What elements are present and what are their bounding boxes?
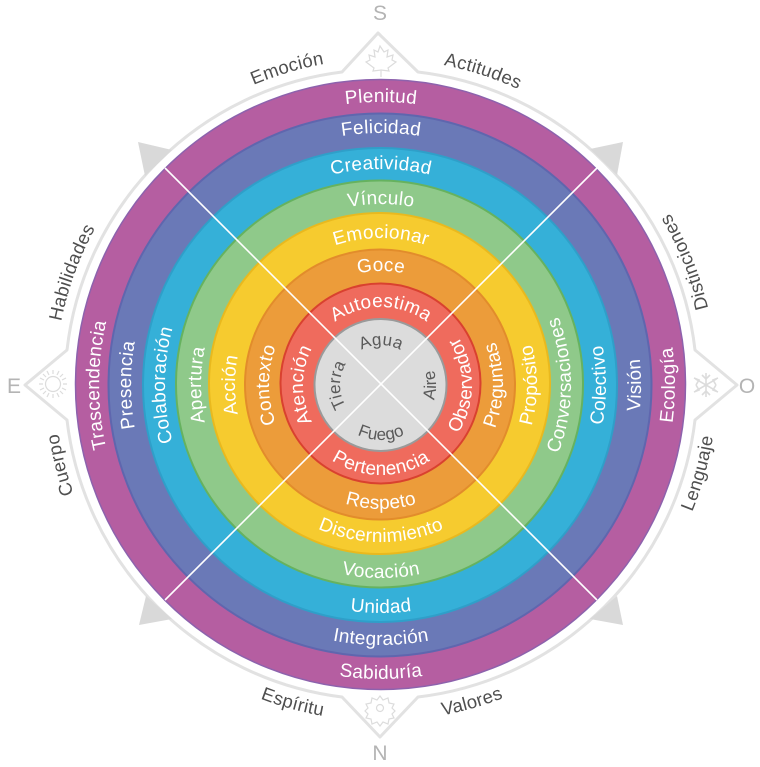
bottom ring labels: Sabiduría — [340, 663, 422, 679]
left ring labels: Apertura — [188, 348, 206, 422]
left ring labels: Trascendencia — [86, 322, 106, 451]
outer labels: Distinciones — [662, 214, 708, 310]
top ring labels: Autoestima — [332, 296, 430, 322]
top ring labels: Goce — [358, 258, 404, 273]
corner triangle NW — [138, 142, 172, 176]
bottom ring labels: Vocación — [344, 561, 419, 578]
outer labels: Habilidades — [49, 225, 94, 320]
top ring labels: Emocionar — [332, 224, 430, 245]
core labels: Tierra — [329, 362, 346, 411]
outer labels: Espíritu — [262, 687, 324, 716]
core labels — [329, 336, 436, 443]
top ring labels — [331, 88, 432, 322]
outer labels: Cuerpo — [50, 435, 72, 496]
top ring labels: Plenitud — [346, 88, 416, 104]
compass letter O: O — [739, 375, 755, 398]
core circle — [314, 319, 446, 451]
top ring labels: Creatividad — [331, 155, 432, 174]
icon: sun — [39, 370, 67, 398]
outer labels: Actitudes — [444, 54, 520, 88]
outer labels: Emoción — [250, 53, 323, 84]
compass letter E: E — [7, 375, 21, 398]
compass letter S: S — [373, 2, 387, 25]
core labels: Fuego — [358, 424, 403, 443]
icon: flower — [365, 696, 395, 726]
corner triangle SE — [590, 596, 623, 625]
right ring labels: Propósito — [519, 346, 541, 424]
icon: maple leaf — [366, 46, 396, 77]
core labels: Agua — [361, 336, 402, 350]
left ring labels: Atención — [290, 346, 312, 422]
bottom ring labels: Discernimiento — [319, 517, 442, 542]
bottom ring labels: Respeto — [346, 491, 415, 513]
icon: snowflake — [694, 373, 718, 397]
bottom ring labels — [319, 450, 442, 679]
right ring labels — [449, 318, 678, 452]
outer labels — [49, 53, 714, 716]
bottom ring labels: Unidad — [352, 597, 410, 614]
compass letter N: N — [372, 742, 388, 765]
outer labels: Valores — [440, 690, 502, 714]
bottom ring labels: Pertenencia — [332, 450, 430, 475]
left ring labels — [86, 322, 312, 451]
top ring labels: Vínculo — [346, 190, 414, 206]
left ring labels: Acción — [221, 356, 238, 414]
rings — [76, 80, 686, 690]
core labels: Aire — [424, 371, 436, 400]
bottom ring labels: Integración — [334, 628, 428, 649]
outer labels: Lenguaje — [680, 436, 714, 511]
left ring labels: Colaboración — [152, 328, 172, 443]
top ring labels: Felicidad — [342, 119, 420, 136]
right ring labels: Conversaciones — [548, 318, 572, 452]
corner triangle NE — [590, 142, 623, 175]
dividing cross — [165, 168, 597, 600]
right ring labels: Observador — [449, 340, 472, 431]
right ring labels: Preguntas — [483, 343, 507, 428]
left ring labels: Contexto — [256, 346, 274, 425]
corner triangle SW — [139, 596, 172, 625]
right ring labels: Colectivo — [590, 346, 606, 424]
right ring labels: Ecología — [660, 347, 678, 422]
left ring labels: Presencia — [119, 342, 135, 429]
right ring labels: Visión — [626, 360, 642, 410]
